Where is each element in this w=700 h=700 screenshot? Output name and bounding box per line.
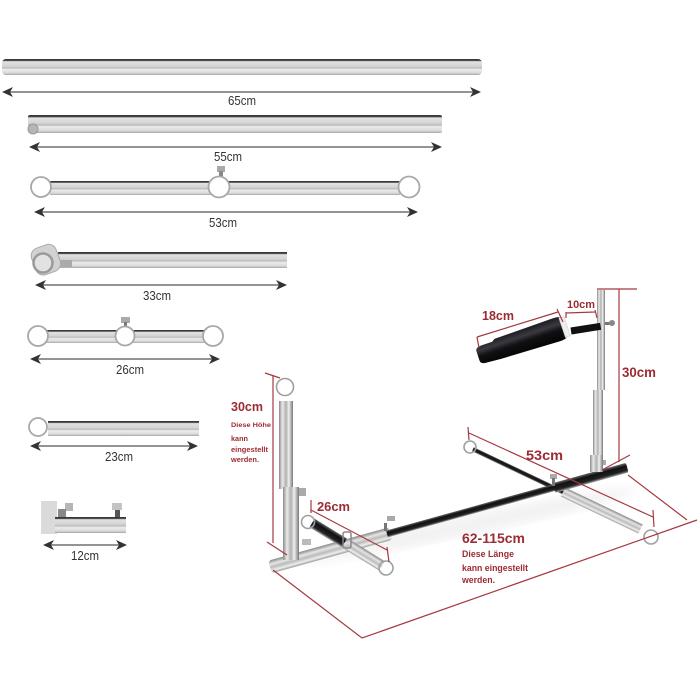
label: 62-115cm with note: Diese Länge <box>462 549 514 559</box>
bar: 55cm: 55cm <box>214 150 242 164</box>
bar: 26cm: 26cm <box>116 363 144 377</box>
label: left 30cm with note: Diese Höhe <box>231 423 272 429</box>
label: 62-115cm with note: werden. <box>461 575 495 585</box>
bar: 12cm: 12cm <box>71 549 99 563</box>
label: 26cm: 26cm <box>317 499 350 514</box>
label: left 30cm with note: eingestellt <box>231 447 269 454</box>
bar: 55cm <box>28 115 442 164</box>
black attachment <box>474 315 571 367</box>
right cross bar <box>464 441 658 544</box>
label: right 30cm: 30cm <box>622 364 656 380</box>
long horizontal bar <box>268 460 629 573</box>
dimension lines <box>265 289 697 638</box>
assembled frame <box>268 290 658 575</box>
bar: 53cm: 53cm <box>209 216 237 230</box>
bar: 26cm <box>28 317 223 377</box>
label: 18cm: 18cm <box>482 308 514 323</box>
label: 62-115cm with note <box>461 530 528 585</box>
label: left 30cm with note: kann <box>231 436 248 443</box>
arm and knob <box>570 320 615 334</box>
bar: 12cm <box>41 501 127 563</box>
label: 62-115cm with note: kann eingestellt <box>462 563 528 573</box>
label: left 30cm with note: 30cm <box>231 399 263 414</box>
bar: 23cm: 23cm <box>105 450 133 464</box>
left cross bar <box>302 516 393 575</box>
bar: 33cm: 33cm <box>143 289 171 303</box>
bar: 65cm <box>2 59 482 108</box>
label: 10cm: 10cm <box>567 299 595 311</box>
label: left 30cm with note <box>230 399 272 464</box>
left post <box>276 378 311 560</box>
bar: 65cm: 65cm <box>228 94 256 108</box>
label: 53cm: 53cm <box>526 447 563 463</box>
bar: 53cm <box>31 166 420 230</box>
bar: 23cm <box>29 418 199 464</box>
right post <box>590 290 605 472</box>
label: left 30cm with note: werden. <box>230 457 259 464</box>
bar: 33cm <box>29 242 287 303</box>
label: 62-115cm with note: 62-115cm <box>462 530 525 546</box>
